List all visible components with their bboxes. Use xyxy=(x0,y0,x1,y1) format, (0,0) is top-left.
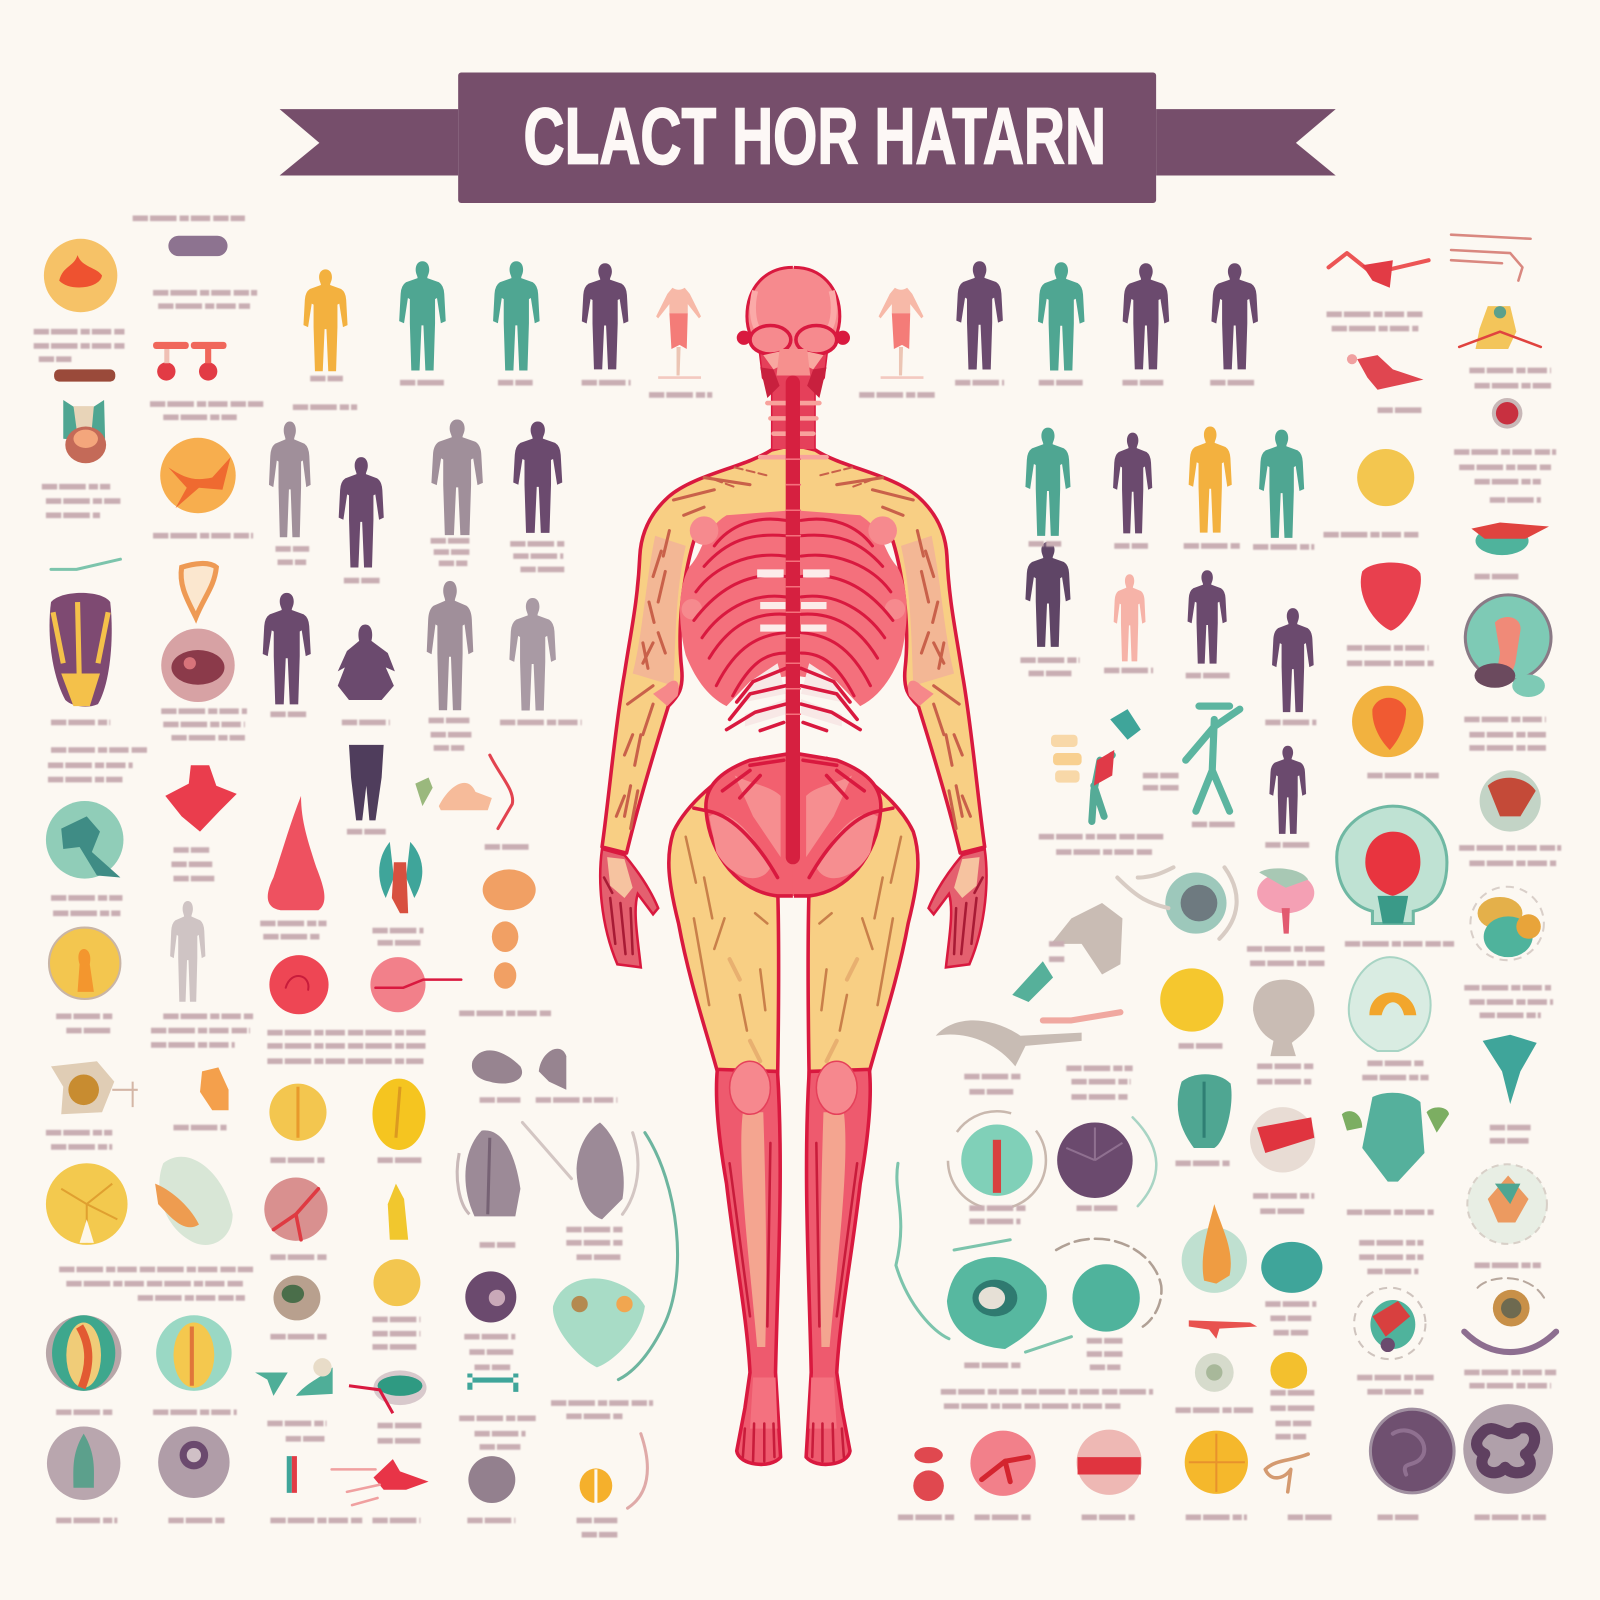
icon: teal circle xyxy=(1465,595,1551,697)
label xyxy=(649,392,712,398)
icon: teal organ xyxy=(379,842,422,913)
icon: red organ xyxy=(332,1459,429,1505)
icon: line pair xyxy=(1451,235,1531,281)
icon: red circle xyxy=(269,955,329,1014)
label xyxy=(1323,532,1418,537)
figure: purple xyxy=(1123,263,1169,369)
label xyxy=(485,844,531,850)
label xyxy=(171,850,214,879)
icon: beige mushroom xyxy=(1253,980,1315,1056)
label xyxy=(1474,1263,1541,1268)
icon: orange pair xyxy=(580,1434,647,1508)
icon: green curve xyxy=(618,1133,678,1380)
label xyxy=(344,578,380,583)
icon: pink mushroom xyxy=(1257,868,1314,934)
label xyxy=(1327,314,1423,329)
label xyxy=(151,1016,253,1045)
label xyxy=(347,829,386,834)
figure: purple xyxy=(339,457,384,568)
icon: teal yellow circle xyxy=(156,1315,232,1391)
icon: teal and red organ xyxy=(349,1370,427,1413)
icon: pale green organ xyxy=(155,1157,233,1245)
label xyxy=(1114,543,1148,549)
text blocks: inner right column xyxy=(859,383,1332,1517)
label xyxy=(480,1230,624,1257)
icon: orange clusters xyxy=(483,869,536,989)
label xyxy=(267,1423,327,1439)
label xyxy=(1143,776,1179,788)
icon: pink circle xyxy=(370,957,461,1012)
label xyxy=(1186,1515,1247,1520)
label xyxy=(464,1337,515,1367)
label xyxy=(400,380,445,385)
label xyxy=(378,1426,423,1441)
figure: purple xyxy=(1188,570,1227,664)
figure: grey xyxy=(269,422,311,537)
icon: big teal organ xyxy=(1337,806,1447,923)
icon: yellow circle xyxy=(1270,1352,1307,1389)
figure: purple xyxy=(582,263,628,369)
figure: green arms raised xyxy=(1186,706,1240,811)
label xyxy=(260,923,327,937)
label xyxy=(46,1133,112,1147)
label xyxy=(1347,1209,1434,1215)
label xyxy=(270,1157,324,1163)
label xyxy=(974,1515,1033,1520)
label xyxy=(500,720,582,725)
label xyxy=(1359,1243,1423,1271)
figure: green xyxy=(399,261,446,371)
icon: red pale circle xyxy=(1250,1107,1315,1172)
text blocks: right column xyxy=(1323,314,1561,1517)
icon: mixed colour circle xyxy=(1354,1288,1426,1359)
icon: orange organ circle xyxy=(44,239,117,312)
figure: green xyxy=(1259,430,1304,538)
label xyxy=(459,1418,536,1447)
icon: left green small organs xyxy=(1051,709,1141,786)
label xyxy=(459,1011,551,1016)
icon: yellow small organ xyxy=(388,1184,408,1240)
label xyxy=(510,544,566,569)
icon: red blob xyxy=(165,765,237,832)
label xyxy=(1077,1205,1117,1211)
figure: purple xyxy=(1269,746,1306,834)
figure: pink xyxy=(1114,574,1146,661)
label xyxy=(1464,719,1546,748)
figure: purple torso xyxy=(349,745,384,820)
label xyxy=(51,720,110,725)
figure: orange xyxy=(303,269,348,371)
lower leg and foot xyxy=(716,1061,781,1464)
label xyxy=(1378,407,1423,413)
icon: yellow circle xyxy=(1185,1431,1248,1494)
icon: yellow circle xyxy=(269,1084,327,1141)
label xyxy=(310,376,343,381)
shoulder and arm xyxy=(602,445,793,853)
icon: red bar xyxy=(1189,1320,1257,1339)
icon: teal red circle xyxy=(948,1111,1046,1209)
label xyxy=(48,750,148,780)
label xyxy=(941,1392,1153,1406)
figure: grey xyxy=(431,419,483,535)
title: CLACT HOR HATARN xyxy=(523,91,1106,180)
label xyxy=(1454,452,1556,500)
label xyxy=(1104,668,1153,673)
mirrored right half xyxy=(793,267,986,1464)
label xyxy=(276,549,309,562)
label xyxy=(1253,544,1314,550)
label xyxy=(153,1409,237,1415)
label xyxy=(173,1125,227,1130)
label xyxy=(1265,842,1311,848)
icon: grey circle xyxy=(47,1427,120,1500)
hand xyxy=(600,849,658,967)
icon: teal organ xyxy=(1178,1074,1232,1148)
icon: yellow circle xyxy=(373,1259,420,1306)
label xyxy=(1257,1066,1314,1082)
icon: yellow circle xyxy=(49,928,120,999)
label xyxy=(56,1016,114,1031)
icon: yellow oval xyxy=(372,1079,426,1150)
icon: pale teal circle xyxy=(1182,1204,1247,1293)
label xyxy=(431,541,469,563)
label xyxy=(1210,380,1257,385)
icon: teal circle xyxy=(46,801,123,879)
icon: orange organ with purple xyxy=(1464,1278,1556,1352)
label xyxy=(161,711,247,738)
icon: small bar xyxy=(287,1456,297,1493)
top row human figures xyxy=(303,261,1258,378)
label xyxy=(1474,574,1520,579)
icon: curve organ xyxy=(1265,1454,1308,1492)
icon: small orange organ xyxy=(200,1067,229,1110)
label xyxy=(153,533,253,538)
icon: purple brain right xyxy=(1463,1404,1553,1494)
label xyxy=(1490,1128,1531,1141)
icon: red squiggle xyxy=(1329,253,1429,288)
icon: mauve circle xyxy=(158,1427,230,1498)
icon: orange hand xyxy=(415,755,513,829)
icon: big teal organ xyxy=(1342,1093,1449,1182)
figure: pink dress xyxy=(656,288,701,378)
figure: purple xyxy=(263,593,311,704)
central anatomical body figure xyxy=(600,267,986,1464)
figure: purple xyxy=(1272,608,1314,712)
label xyxy=(378,1157,423,1163)
icon: grey organs xyxy=(472,1049,566,1090)
figure: green and red xyxy=(1092,755,1112,821)
label xyxy=(582,380,631,385)
label xyxy=(293,404,357,410)
icon: purple circle xyxy=(465,1271,516,1322)
icon: grey lung right xyxy=(522,1122,638,1219)
label xyxy=(153,293,257,306)
icon: orange circle xyxy=(160,438,236,513)
icon: teal organ circle xyxy=(46,1315,121,1391)
icon: red pair xyxy=(153,342,227,381)
icon: pale orange circle xyxy=(1467,1164,1547,1244)
figure: purple xyxy=(956,261,1003,369)
icon: tall purple organ xyxy=(50,559,120,707)
label xyxy=(964,1363,1020,1368)
icon: green leaf xyxy=(1012,961,1053,1002)
icon: grey long organ xyxy=(936,1012,1120,1066)
figure: purple xyxy=(513,421,562,533)
label xyxy=(1378,1515,1418,1520)
icon: purple circle xyxy=(1057,1117,1156,1206)
text blocks: left column xyxy=(34,218,263,1520)
icon: dusty circle xyxy=(161,629,235,702)
icon: teal and red dish xyxy=(1471,522,1549,555)
label xyxy=(1020,660,1080,673)
label xyxy=(51,898,122,913)
icon: pale green blob xyxy=(553,1278,645,1367)
label xyxy=(270,1334,329,1339)
icon: red pair small xyxy=(913,1447,944,1501)
label xyxy=(372,1319,420,1347)
label xyxy=(969,1208,1026,1221)
label xyxy=(1122,380,1163,385)
icon: purple brain left xyxy=(1370,1409,1454,1493)
label xyxy=(1176,1407,1255,1413)
label xyxy=(1362,1063,1429,1078)
label xyxy=(133,216,245,221)
icon: dark red ball xyxy=(1492,398,1522,429)
text blocks: inner left column xyxy=(260,379,712,1535)
label xyxy=(372,1518,420,1523)
icon: pale circle xyxy=(1195,1353,1234,1392)
icon: yellow circle xyxy=(1160,968,1223,1032)
label xyxy=(1288,1515,1332,1520)
right body figures xyxy=(1025,427,1314,834)
label xyxy=(42,487,120,515)
icon: yellow and red organ xyxy=(1459,306,1541,349)
icon: red squiggle 2 xyxy=(1347,354,1423,390)
label xyxy=(1464,1372,1556,1386)
icon: large yellow circle xyxy=(46,1163,128,1245)
figure: purple xyxy=(1113,433,1152,533)
label xyxy=(964,1077,1020,1092)
left organ icons xyxy=(44,236,678,1508)
label xyxy=(1087,1341,1122,1367)
label xyxy=(1265,1304,1316,1333)
figure: green xyxy=(493,261,540,371)
icon: mauve pill xyxy=(168,236,228,256)
label xyxy=(1367,773,1439,778)
icon: teal stem organ xyxy=(1483,1035,1537,1104)
icon: red heart xyxy=(1361,562,1421,631)
figure: purple xyxy=(1025,542,1070,647)
label xyxy=(1029,541,1061,547)
icon: teal bar xyxy=(467,1373,518,1392)
title banner xyxy=(280,72,1336,203)
label xyxy=(1192,822,1235,827)
figure: green xyxy=(1025,428,1070,536)
icon: pink red circle xyxy=(1077,1430,1142,1495)
label xyxy=(577,1520,617,1535)
label xyxy=(1265,720,1316,725)
figure: purple xyxy=(1211,263,1258,369)
icon: orange circle xyxy=(1352,686,1423,757)
label xyxy=(270,1254,327,1260)
icon: small green organs xyxy=(255,1358,333,1396)
label xyxy=(1184,543,1240,549)
label xyxy=(56,1518,117,1523)
icon: dusty circle xyxy=(1480,770,1541,832)
icon: grey teal eye xyxy=(1117,867,1237,939)
label xyxy=(1474,1515,1546,1520)
skull half xyxy=(737,267,794,457)
label xyxy=(270,1518,362,1523)
right organ icons xyxy=(896,235,1556,1501)
label xyxy=(480,1097,617,1103)
pelvis half xyxy=(694,753,794,896)
label xyxy=(859,392,935,398)
label xyxy=(1039,380,1084,385)
figure: pink dress xyxy=(879,288,923,378)
icon: grey organ xyxy=(1051,903,1122,974)
figure: orange xyxy=(1189,427,1232,533)
figure: grey xyxy=(427,581,473,710)
rib cage half xyxy=(680,510,793,731)
figure: pale grey xyxy=(170,901,205,1002)
label xyxy=(1179,1043,1224,1049)
label xyxy=(1253,1196,1314,1211)
label xyxy=(1082,1515,1135,1520)
label xyxy=(1347,648,1434,663)
label xyxy=(267,1033,429,1061)
icon: teal yellow organ xyxy=(1470,887,1544,960)
label xyxy=(1270,1393,1316,1437)
icon: grey lung left xyxy=(457,1130,520,1216)
label xyxy=(270,712,306,717)
label xyxy=(372,931,423,943)
icon: yellow circle xyxy=(1357,449,1414,506)
icon: teal circle xyxy=(1261,1242,1322,1293)
icon: pale arch organ xyxy=(1349,957,1431,1051)
icon: beige organ xyxy=(51,1061,138,1114)
label xyxy=(34,332,124,359)
figure: grey xyxy=(509,598,556,711)
spine xyxy=(777,349,810,857)
label xyxy=(1039,837,1165,852)
icon: large teal rosette xyxy=(896,1163,1071,1352)
label xyxy=(1345,941,1454,947)
label xyxy=(1049,944,1066,959)
label xyxy=(898,1515,954,1520)
label xyxy=(1459,848,1561,863)
figure: purple cape xyxy=(338,624,395,700)
icon: dusty circle xyxy=(264,1178,328,1241)
label xyxy=(342,720,390,725)
figure: green xyxy=(1038,262,1084,371)
label xyxy=(1464,988,1553,1015)
icon: throat organ xyxy=(54,369,115,463)
icon: brown organ xyxy=(273,1276,320,1320)
label xyxy=(498,380,533,385)
label xyxy=(56,1409,112,1415)
label xyxy=(1469,370,1551,386)
label xyxy=(955,380,1004,385)
label xyxy=(1186,673,1230,678)
label xyxy=(467,1518,515,1523)
left body figures xyxy=(170,419,562,1002)
icon: outline organ xyxy=(181,563,216,617)
label xyxy=(1176,1161,1230,1166)
label xyxy=(1247,949,1327,963)
hip and thigh xyxy=(669,760,779,1082)
label xyxy=(150,404,263,417)
label xyxy=(59,1269,253,1298)
label xyxy=(168,1518,227,1523)
icon: red cone xyxy=(268,796,324,910)
label xyxy=(551,1403,653,1416)
label xyxy=(1357,1378,1434,1392)
icon: grey circle xyxy=(468,1456,515,1503)
icon: teal circle xyxy=(1056,1239,1161,1332)
label xyxy=(1066,1068,1133,1097)
label xyxy=(429,720,471,748)
icon: pink circle xyxy=(970,1431,1036,1496)
